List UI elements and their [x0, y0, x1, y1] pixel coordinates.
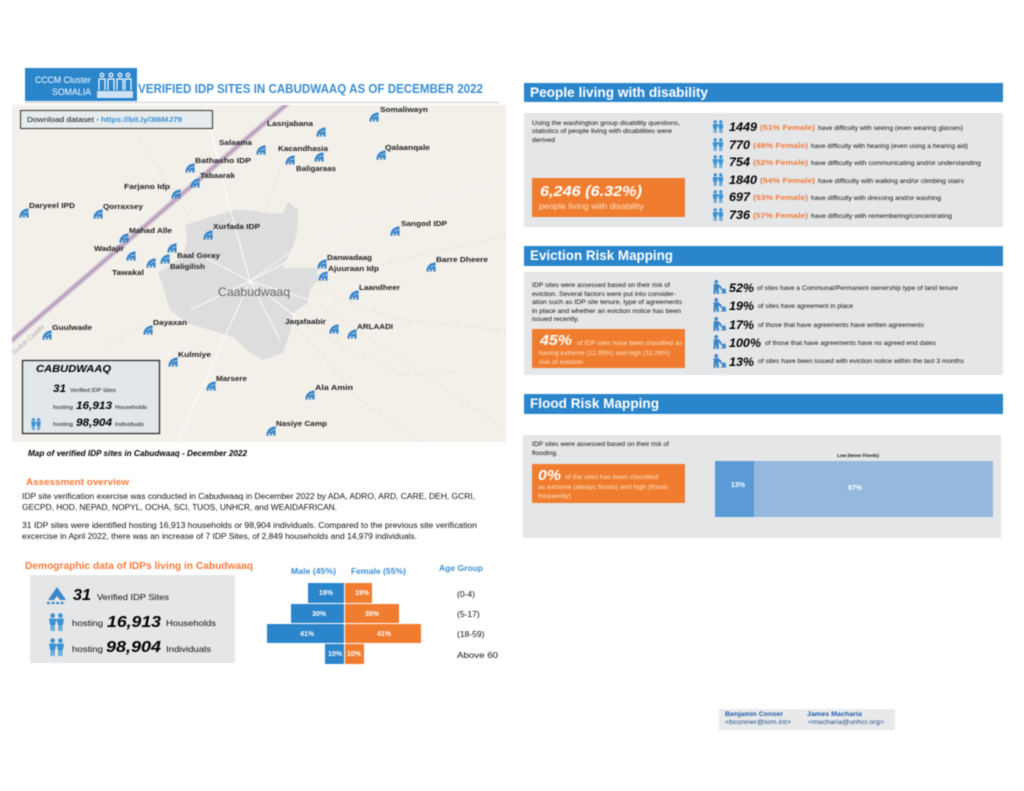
- panel: disability: derived: [532, 138, 555, 144]
- site: ARLAADI: [347, 322, 393, 339]
- site: Daryeel IPD: [19, 201, 76, 218]
- stat: eviction notice: [714, 354, 964, 369]
- callout: flood risk: as extreme (always floods) and high (floods: [538, 485, 668, 491]
- callout: eviction risk: risk of eviction: [539, 360, 583, 366]
- site: Ala Amin: [305, 383, 353, 400]
- panel: eviction: in place and whether an eviction notice has been: [532, 309, 681, 315]
- site: Baligilish: Baligilish: [170, 262, 205, 271]
- panel: disability: [524, 113, 1003, 227]
- panel: eviction: IDP sites were assessed based on their risk of: [532, 283, 670, 289]
- map of verified IDP sites: Dudub Caadle: [11, 323, 47, 356]
- callout: eviction risk: of IDP sites have been classified as: [577, 341, 682, 347]
- stat: hearing: [713, 138, 968, 152]
- site: Mahad Alle: Mahad Alle: [129, 226, 172, 235]
- panel: eviction: [524, 272, 1003, 375]
- site: Ajuuraan Idp: Ajuuraan Idp: [328, 264, 379, 273]
- header: flood risk mapping: [524, 394, 1003, 414]
- stat: eviction notice: 13%: [729, 355, 754, 369]
- stacked bar: flood risk: 87%: [848, 485, 863, 492]
- site: Dayaxan: [143, 318, 187, 335]
- stat: walking: have difficulty with walking and/or climbing stairs: [818, 179, 964, 185]
- site: Laandheer: [349, 283, 400, 300]
- assessment overview text: GECPD, HOD, NEPAD, NOPYL, OCHA, SCI, TUOS, UNHCR, and WEAIDAFRICAN.: [22, 503, 337, 512]
- stat: seeing: (51% Female): [760, 123, 816, 132]
- stat: walking: 1840: [729, 173, 757, 187]
- inset summary box: 31: [53, 383, 66, 395]
- header: people living with disability: People living with disability: [530, 84, 708, 100]
- stat: seeing: have difficulty with seeing (even wearing glasses): [818, 126, 963, 132]
- callout: people living with disability: 6,246 (6.32%): [540, 183, 642, 200]
- age and sex pyramid chart: (0-4): [457, 589, 475, 599]
- panel: flood: IDP sites were assessed based on their risk of: [532, 442, 669, 448]
- site: Guulwade: Guulwade: [52, 323, 92, 332]
- stat: walking: [713, 173, 964, 187]
- inset summary box: hosting: [53, 405, 73, 411]
- site: Qorraxsey: [93, 202, 144, 219]
- site: Salaama: Salaama: [219, 138, 253, 147]
- panel: demographic stats: Individuals: [166, 644, 211, 654]
- age and sex pyramid chart: 41%: [377, 631, 392, 638]
- callout: people living with disability: people living with disability: [539, 202, 644, 211]
- site: Laandheer: Laandheer: [359, 283, 400, 292]
- site: Ajuuraan Idp: [318, 264, 379, 281]
- stat: dressing: (53% Female): [753, 193, 809, 202]
- purple main road: [10, 103, 288, 342]
- site: Qalaanqale: Qalaanqale: [385, 143, 430, 152]
- panel: demographic stats: Households: [166, 618, 216, 628]
- stat: eviction notice: of sites have been issued with eviction notice within the last 3 months: [758, 359, 964, 365]
- callout: eviction risk: [532, 329, 685, 368]
- header logo: CCCM Cluster Somalia: [25, 68, 137, 101]
- stat: land tenure: of sites have a Communal/Permanent ownership type of land tenure: [757, 286, 959, 292]
- map caption: Map of verified IDP sites in Cabudwaaq - December 2022: [28, 449, 248, 458]
- site: Jaqafaabir: [285, 317, 339, 334]
- site: Sangod IDP: [390, 219, 447, 236]
- stacked bar: flood risk: Low (Never Floods): [837, 453, 879, 458]
- callout: flood risk: of the sites has been classified: [565, 475, 658, 481]
- site: Barre Dheere: [426, 255, 488, 272]
- panel: disability: statistics of people living with disabilities were: [532, 129, 673, 135]
- panel: demographic stats: hosting: [72, 644, 103, 654]
- panel: demographic stats: [30, 575, 235, 663]
- site: Mahad Alle: [119, 226, 172, 243]
- site: Farjano Idp: [124, 182, 181, 199]
- stat: no agreed end dates: of those that have agreements have no agreed end dates: [765, 341, 936, 347]
- site: Ala Amin: Ala Amin: [315, 383, 353, 392]
- stat: communicating: 754: [729, 155, 750, 169]
- icon: people: [49, 638, 64, 656]
- map label: Caabudwaaq: Caabudwaaq: [218, 285, 290, 299]
- panel: demographic stats: 98,904: [106, 639, 161, 656]
- callout: people living with disability: [532, 178, 685, 217]
- panel: flood: flooding.: [532, 451, 558, 457]
- demographic heading: Demographic data of IDPs living in Cabudwaaq: [25, 560, 253, 572]
- callout: flood risk: 0%: [538, 467, 561, 484]
- site: Bathasho IDP: Bathasho IDP: [195, 156, 251, 165]
- contacts footer: <bconner@iom.int>: [725, 720, 792, 726]
- stat: hearing: have difficulty with hearing (even using a hearing aid): [811, 144, 968, 150]
- panel: demographic stats: 31: [73, 587, 91, 604]
- panel: disability: Using the washington group disability questions,: [532, 121, 680, 127]
- main title: VERIFIED IDP SITES IN CABUDWAAQ AS OF DECEMBER 2022: [138, 82, 483, 96]
- stat: written agreements: [714, 317, 924, 332]
- site: ARLAADI: ARLAADI: [357, 322, 393, 331]
- map of verified IDP sites: [10, 103, 506, 442]
- panel: demographic stats: Verified IDP Sites: [97, 592, 169, 602]
- assessment overview heading: Assessment overview: [26, 477, 130, 488]
- callout: flood risk: frequently): [538, 494, 571, 500]
- site: Danwadaag: Danwadaag: [327, 253, 372, 262]
- assessment overview text: [22, 492, 477, 541]
- site: Kacandhasia: Kacandhasia: [278, 144, 329, 153]
- stat: hearing: (48% Female): [753, 141, 809, 150]
- stat: remembering: 736: [729, 208, 750, 222]
- inset summary box: Households: [115, 405, 148, 411]
- callout: eviction risk: 45%: [539, 332, 572, 349]
- stat: land tenure: 52%: [729, 281, 754, 295]
- site: Danwadaag: [317, 253, 372, 269]
- inset summary box: [22, 360, 160, 434]
- age and sex pyramid chart: [267, 564, 498, 664]
- site: Qalaanqale: [376, 143, 430, 160]
- header: eviction risk mapping: [524, 246, 1003, 266]
- age and sex pyramid chart: 10%: [328, 651, 343, 658]
- site: Sangod IDP: Sangod IDP: [401, 219, 447, 228]
- callout: flood risk: [532, 464, 685, 503]
- site: Salaama: [219, 138, 266, 155]
- assessment overview text: 31 IDP sites were identified hosting 16,913 households or 98,904 individuals. Compared to the previous site verification: [22, 521, 477, 530]
- stat: no agreed end dates: [714, 335, 936, 350]
- city area: [158, 202, 318, 360]
- inset summary box: 98,904: [76, 417, 112, 429]
- stat: hearing: 770: [729, 138, 750, 152]
- header logo: CCCM Cluster Somalia: SOMALIA: [52, 87, 92, 98]
- site: Qorraxsey: Qorraxsey: [103, 202, 144, 211]
- site: Wadajir: Wadajir: [94, 244, 124, 253]
- stat: dressing: have difficulty with dressing and/or washing: [811, 196, 941, 202]
- stat: dressing: 697: [729, 190, 751, 204]
- site: Xurfada IDP: Xurfada IDP: [213, 222, 260, 231]
- age and sex pyramid chart: Above 60: [457, 650, 498, 660]
- contacts footer: Benjamin Conser: [725, 712, 784, 718]
- assessment overview text: IDP site verification exercise was conducted in Cabudwaaq in December 2022 by ADA, ADRO, ARD, CARE, DEH, GCRI,: [22, 492, 475, 501]
- stat: remembering: (57% Female): [753, 211, 809, 220]
- stat: remembering: [713, 208, 952, 222]
- site: Lasnjabana: [267, 119, 326, 137]
- site: Baligilish: [160, 254, 205, 271]
- stat: written agreements: of those that have agreements have written agreements: [758, 323, 924, 329]
- site: Marsere: Marsere: [216, 374, 247, 383]
- site: Wadajir: [94, 244, 136, 261]
- contacts footer: [719, 709, 895, 730]
- stat: communicating: [713, 155, 981, 169]
- icon: people: [49, 613, 64, 631]
- age and sex pyramid chart: 19%: [319, 590, 334, 597]
- panel: flood: [523, 435, 1001, 538]
- download dataset box: [20, 110, 212, 128]
- inset summary box: CABUDWAAQ: [36, 363, 111, 375]
- panel: eviction: ation such as IDP site tenure, type of agreements: [532, 300, 682, 306]
- header: eviction risk mapping: Eviction Risk Mapping: [530, 247, 673, 263]
- site: Bathasho IDP: [185, 156, 251, 173]
- stat: communicating: have difficulty with communicating and/or understanding: [811, 161, 981, 167]
- age and sex pyramid chart: Age Group: [439, 564, 483, 573]
- download dataset box: https://bit.ly/3I6MJ79: [101, 115, 182, 124]
- site: Dayaxan: Dayaxan: [153, 318, 187, 327]
- inset summary box: Individuals: [115, 422, 145, 428]
- site: Marsere: [206, 374, 247, 391]
- site: Tabaarak: [190, 171, 236, 188]
- site: Kacandhasia: [278, 144, 329, 162]
- site: Somaliwayn: [369, 105, 428, 122]
- inset summary box: Verified IDP Sites: [70, 388, 117, 394]
- header: people living with disability: [524, 83, 1003, 102]
- inset summary box: 16,913: [76, 400, 112, 412]
- site: Kulmiye: Kulmiye: [178, 350, 211, 359]
- contacts footer: <macharia@unhcr.org>: [808, 720, 885, 726]
- site: Nasiye Camp: Nasiye Camp: [276, 419, 327, 428]
- site: Kulmiye: [168, 350, 211, 367]
- site: Guulwade: [42, 323, 92, 340]
- age and sex pyramid chart: 30%: [365, 611, 380, 618]
- site: Lasnjabana: Lasnjabana: [267, 119, 314, 128]
- age and sex pyramid chart: Female (55%): [351, 567, 406, 576]
- site: Somaliwayn: Somaliwayn: [380, 105, 428, 114]
- stat: remembering: have difficulty with remembering/concentrating: [811, 214, 952, 220]
- site: Xurfada IDP: [203, 222, 260, 240]
- age and sex pyramid chart: 19%: [355, 590, 370, 597]
- header: flood risk mapping: Flood Risk Mapping: [530, 395, 659, 411]
- site: Barre Dheere: Barre Dheere: [436, 255, 488, 264]
- age and sex pyramid chart: Male (45%): [291, 567, 336, 576]
- assessment overview text: excercise in April 2022, there was an increase of 7 IDP Sites, of 2,849 households and 14,979 individuals.: [22, 532, 417, 541]
- age and sex pyramid chart: (5-17): [457, 609, 480, 619]
- contacts footer: James Macharia: [807, 712, 863, 718]
- panel: demographic stats: hosting: [72, 618, 103, 628]
- site: Baal Goray: Baal Goray: [177, 251, 221, 260]
- age and sex pyramid chart: 10%: [347, 651, 362, 658]
- panel: demographic stats: 16,913: [107, 614, 161, 631]
- site: Farjano Idp: Farjano Idp: [124, 182, 170, 191]
- site: Nasiye Camp: [266, 419, 327, 436]
- panel: eviction: eviction. Several factors were put into consider-: [532, 292, 676, 298]
- age and sex pyramid chart: 30%: [312, 611, 327, 618]
- site: Tawakal: Tawakal: [112, 268, 144, 277]
- stat: seeing: 1449: [729, 120, 757, 134]
- header logo: CCCM Cluster Somalia: CCCM Cluster: [35, 75, 91, 86]
- stat: agreement in place: [714, 298, 854, 313]
- stacked bar: flood risk: 13%: [731, 482, 746, 489]
- site: Daryeel IPD: Daryeel IPD: [29, 201, 76, 210]
- stat: agreement in place: of sites have agreement in place: [758, 304, 854, 310]
- site: Tawakal: [112, 258, 156, 277]
- stat: land tenure: [714, 280, 959, 295]
- callout: eviction risk: having extreme (12.95%) and high (32.26%): [539, 351, 670, 357]
- site: Tabaarak: Tabaarak: [200, 171, 236, 180]
- icon: people: [31, 418, 41, 430]
- site: Baligaraas: Baligaraas: [296, 164, 336, 173]
- icon: site: [47, 587, 66, 604]
- panel: eviction: issued recently.: [532, 317, 579, 323]
- stacked bar: flood risk: [715, 453, 993, 517]
- stat: communicating: (52% Female): [753, 158, 809, 167]
- inset summary box: hosting: [53, 422, 73, 428]
- site: Baligaraas: [285, 155, 336, 173]
- stat: no agreed end dates: 100%: [729, 336, 761, 350]
- site: Jaqafaabir: Jaqafaabir: [285, 317, 326, 326]
- stat: seeing: [713, 120, 963, 134]
- age and sex pyramid chart: (18-59): [457, 629, 485, 639]
- site: Baal Goray: [167, 243, 221, 260]
- stat: written agreements: 17%: [729, 318, 754, 332]
- age and sex pyramid chart: 41%: [300, 631, 315, 638]
- stat: dressing: [713, 190, 941, 204]
- stat: agreement in place: 19%: [729, 299, 754, 313]
- download dataset box: Download dataset -: [27, 115, 100, 124]
- stat: walking: (54% Female): [760, 176, 816, 185]
